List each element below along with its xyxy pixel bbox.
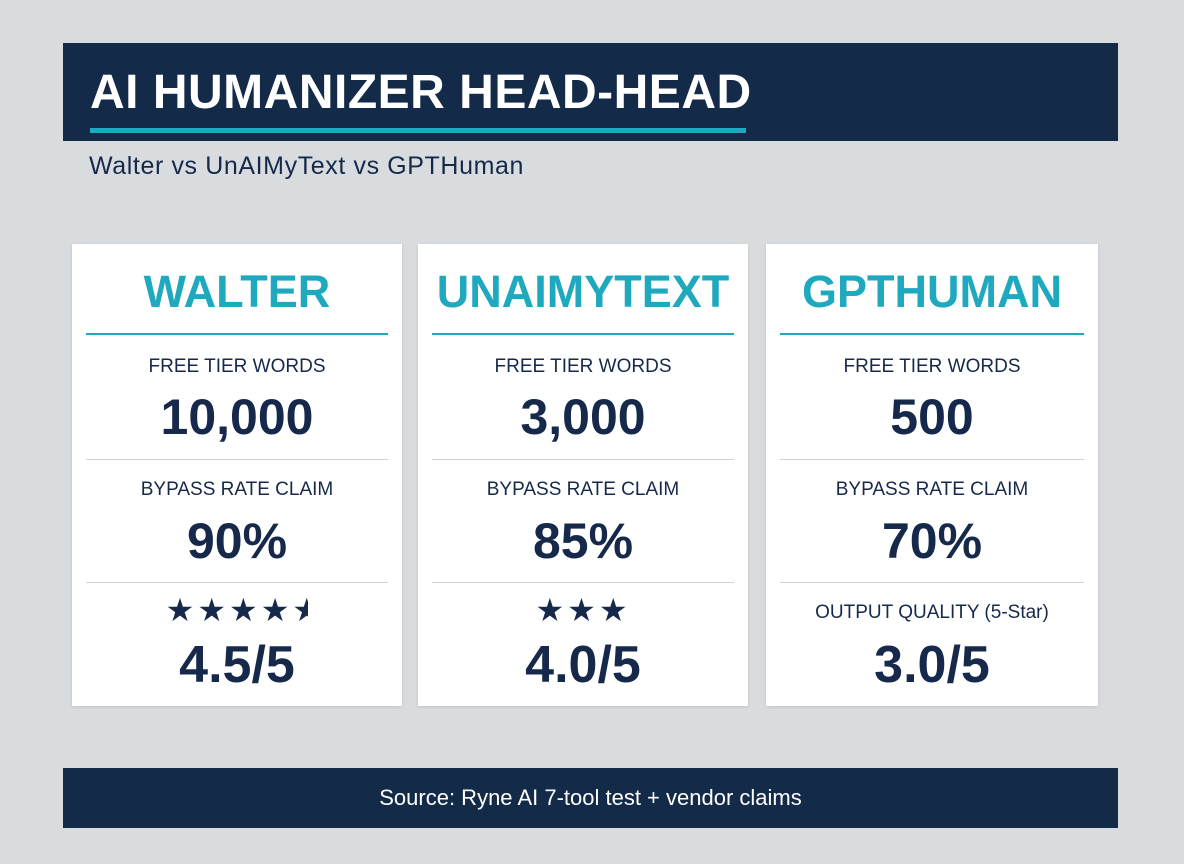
title: AI HUMANIZER HEAD-HEAD (90, 66, 752, 119)
panel: UnAIMyText (418, 244, 748, 706)
panel: Walter (72, 244, 402, 706)
title underline (90, 128, 746, 133)
heading: UNAIMYTEXT (437, 266, 729, 317)
value: 10,000 (161, 389, 313, 445)
heading: GPTHUMAN (802, 266, 1062, 317)
panel: GPTHuman (766, 244, 1098, 706)
label: free tier: FREE TIER WORDS (148, 356, 326, 377)
label: free tier: FREE TIER WORDS (844, 356, 1020, 377)
icon: stars 3: ★★★ (535, 592, 631, 628)
label: bypass: BYPASS RATE CLAIM (836, 479, 1028, 500)
value: 500 (890, 389, 974, 445)
value: 3,000 (520, 389, 646, 445)
heading: WALTER (144, 266, 330, 317)
subtitle: Walter vs UnAIMyText vs GPTHuman (89, 152, 524, 180)
icon: stars 4.5: ★★★★ (166, 592, 292, 628)
value: 85% (533, 513, 633, 569)
rating: 3.0/5 (874, 636, 990, 694)
label: output quality: OUTPUT QUALITY (5-Star) (815, 602, 1049, 623)
label: free tier: FREE TIER WORDS (494, 356, 672, 377)
value: 90% (187, 513, 287, 569)
title bar (63, 43, 1118, 141)
footer bar: Source: Ryne AI 7-tool test + vendor claims (379, 785, 802, 810)
value: 70% (882, 513, 982, 569)
rating: 4.0/5 (525, 636, 641, 694)
footer bar (63, 768, 1118, 828)
rating: 4.5/5 (179, 636, 295, 694)
label: bypass: BYPASS RATE CLAIM (141, 479, 333, 500)
label: bypass: BYPASS RATE CLAIM (487, 479, 679, 500)
